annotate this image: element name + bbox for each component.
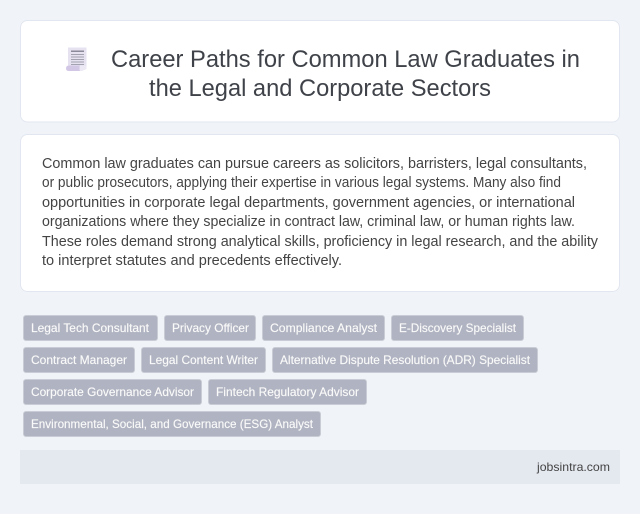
title: Career Paths for Common Law Graduates in [111, 46, 580, 73]
tag: Legal Tech Consultant: Legal Tech Consultant [31, 321, 150, 335]
tag: Corporate Governance Advisor [24, 380, 202, 404]
text block: description paragraph: to interpret statutes and precedents effectively. [42, 253, 342, 269]
tag: Privacy Officer [164, 316, 256, 340]
tag: Alternative Dispute Resolution (ADR) Specialist [272, 348, 538, 372]
text block: description paragraph: opportunities in corporate legal departments, government agencies, or international [42, 195, 575, 211]
text block: description paragraph: These roles demand strong analytical skills, proficiency in legal research, and the ability [42, 234, 599, 250]
tag: Compliance Analyst [262, 316, 384, 340]
tag list [24, 316, 538, 436]
tag: Privacy Officer: Privacy Officer [172, 321, 249, 335]
tag: Legal Content Writer [142, 348, 266, 372]
tag: Legal Tech Consultant [24, 316, 158, 340]
text block: description paragraph: organizations where they specialize in contract law, criminal law, or human rights law. [42, 214, 575, 230]
panel: title card [20, 20, 620, 122]
tag: E-Discovery Specialist [392, 316, 524, 340]
tag: Corporate Governance Advisor: Corporate Governance Advisor [31, 385, 194, 399]
tag: Contract Manager: Contract Manager [31, 353, 127, 367]
tag: Fintech Regulatory Advisor [208, 380, 366, 404]
tag: Alternative Dispute Resolution (ADR) Specialist: Alternative Dispute Resolution (ADR) Specialist [280, 353, 531, 367]
tag: Environmental, Social, and Governance (ESG) Analyst: Environmental, Social, and Governance (ESG) Analyst [31, 417, 314, 431]
tag: Legal Content Writer: Legal Content Writer [149, 353, 258, 367]
tag: Environmental, Social, and Governance (ESG) Analyst [24, 412, 320, 436]
panel: description [20, 134, 620, 292]
tag: E-Discovery Specialist: E-Discovery Specialist [399, 321, 517, 335]
text block: description paragraph: Common law graduates can pursue careers as solicitors, barristers, legal consultants, [42, 156, 587, 172]
footer text: site name: jobsintra.com [536, 460, 610, 474]
text block: description paragraph [42, 156, 599, 269]
text block: description paragraph: or public prosecutors, applying their expertise in various legal systems. Many also find [42, 175, 561, 191]
title: the Legal and Corporate Sectors [149, 75, 491, 102]
title [111, 46, 580, 102]
tag: Compliance Analyst: Compliance Analyst [270, 321, 378, 335]
footer bar [20, 450, 620, 484]
tag: Contract Manager [24, 348, 134, 372]
icon: legal document scroll [66, 48, 86, 71]
tag: Fintech Regulatory Advisor: Fintech Regulatory Advisor [216, 385, 359, 399]
